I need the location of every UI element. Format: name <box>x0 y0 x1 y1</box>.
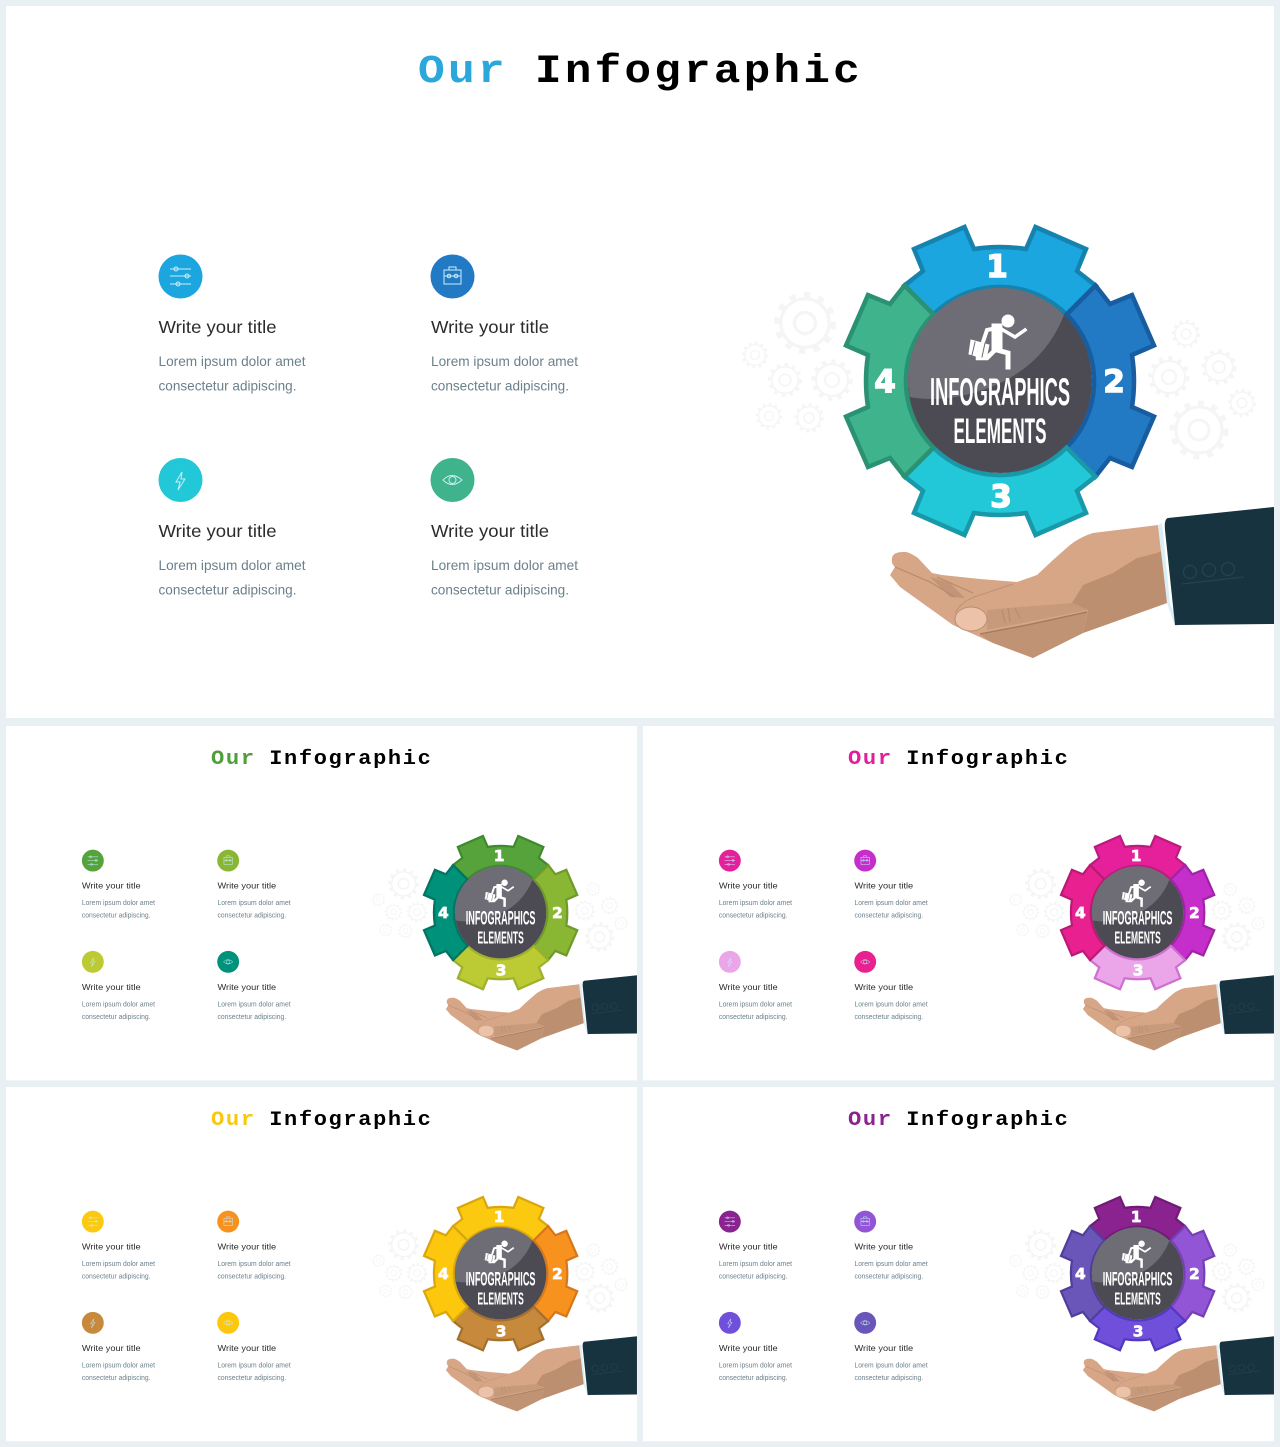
hand holding gear <box>890 507 1274 658</box>
item 3 body: consectetur adipiscing. <box>82 1375 151 1382</box>
gear diagram: INFOGRAPHICS <box>466 908 535 930</box>
item 2 body: Lorem ipsum dolor amet <box>854 1261 928 1268</box>
gear diagram: 3 <box>1133 961 1143 979</box>
gear diagram: 3 <box>496 961 506 979</box>
icon: eye <box>854 1312 876 1334</box>
gear diagram: 4 <box>1075 904 1086 922</box>
item 3 body: consectetur adipiscing. <box>719 1014 788 1021</box>
hand holding gear <box>446 1336 637 1411</box>
item 4 body: Lorem ipsum dolor amet <box>854 1002 928 1009</box>
item 2 body: Lorem ipsum dolor amet <box>217 1261 291 1268</box>
title <box>418 50 863 95</box>
title <box>848 1108 1069 1131</box>
gear diagram: ELEMENTS <box>1114 927 1161 947</box>
item 4 body <box>854 1363 928 1382</box>
icon: briefcase <box>854 850 876 872</box>
icon: briefcase <box>854 1211 876 1233</box>
icon: eye <box>217 951 239 973</box>
item 3 body: Lorem ipsum dolor amet <box>82 1002 155 1009</box>
item 3 body <box>82 1363 155 1382</box>
item 2 heading: Write your title <box>217 1242 276 1252</box>
item 1 heading: Write your title <box>82 881 141 891</box>
title: Our <box>211 747 256 770</box>
title: Our <box>848 1108 893 1131</box>
gear diagram: ELEMENTS <box>477 1288 524 1308</box>
item 3 body: consectetur adipiscing. <box>82 1014 151 1021</box>
item 2 <box>217 1211 291 1280</box>
item 1 body: Lorem ipsum dolor amet <box>719 900 792 907</box>
panel: pink slide <box>643 726 1274 1080</box>
item 3 heading: Write your title <box>82 982 141 992</box>
item 3 <box>719 951 792 1021</box>
gear diagram: 3 <box>496 1322 506 1340</box>
item 2 <box>430 254 578 394</box>
item 1 body: consectetur adipiscing. <box>719 912 788 919</box>
gear diagram: 4 <box>1075 1265 1086 1283</box>
gear diagram: 1 <box>494 1208 504 1226</box>
item 4 body: consectetur adipiscing. <box>431 582 569 598</box>
item 1 body <box>158 353 306 394</box>
item 1 body: Lorem ipsum dolor amet <box>82 1261 155 1268</box>
item 3 body <box>158 557 306 598</box>
item 4 body <box>217 1363 291 1382</box>
item 3 body <box>82 1002 155 1021</box>
icon: lightning bolt <box>719 951 741 973</box>
icon: briefcase <box>430 254 474 298</box>
item 2 body <box>854 1261 928 1280</box>
icon: lightning bolt <box>82 951 104 973</box>
icon: briefcase <box>217 1211 239 1233</box>
item 1 <box>82 1211 155 1280</box>
item 3 body: Lorem ipsum dolor amet <box>719 1363 792 1370</box>
item 1 body: consectetur adipiscing. <box>719 1273 788 1280</box>
item 2 body: consectetur adipiscing. <box>431 378 569 394</box>
icon: sliders <box>158 254 202 298</box>
gear diagram: ELEMENTS <box>477 927 524 947</box>
icon: eye <box>854 951 876 973</box>
title <box>848 747 1069 770</box>
item 3 <box>82 1312 155 1382</box>
title: Infographic <box>269 1108 432 1131</box>
item 1 body: consectetur adipiscing. <box>158 378 296 394</box>
gear diagram: ELEMENTS <box>954 412 1046 451</box>
item 1 heading: Write your title <box>158 317 276 337</box>
item 4 <box>217 1312 291 1382</box>
item 3 body: Lorem ipsum dolor amet <box>719 1002 792 1009</box>
icon: eye <box>430 458 474 502</box>
icon: sliders <box>719 1211 741 1233</box>
item 4 heading: Write your title <box>431 521 549 541</box>
item 4 body: consectetur adipiscing. <box>854 1375 923 1382</box>
item 2 body: Lorem ipsum dolor amet <box>854 900 928 907</box>
item 3 body <box>719 1363 792 1382</box>
item 1 body: Lorem ipsum dolor amet <box>82 900 155 907</box>
item 2 <box>854 850 928 919</box>
item 2 body: Lorem ipsum dolor amet <box>217 900 291 907</box>
gear diagram: 4 <box>438 1265 449 1283</box>
item 3 heading: Write your title <box>82 1343 141 1353</box>
item 4 heading: Write your title <box>854 982 913 992</box>
item 1 <box>158 254 306 394</box>
background gear icons <box>373 1231 627 1311</box>
gear diagram <box>424 1197 577 1350</box>
icon: lightning bolt <box>82 1312 104 1334</box>
item 4 heading: Write your title <box>217 1343 276 1353</box>
item 2 heading: Write your title <box>854 881 913 891</box>
item 2 <box>854 1211 928 1280</box>
item 3 body <box>719 1002 792 1021</box>
item 3 body: Lorem ipsum dolor amet <box>158 557 306 573</box>
gear diagram: 3 <box>990 479 1012 515</box>
item 4 <box>854 1312 928 1382</box>
item 2 heading: Write your title <box>854 1242 913 1252</box>
item 3 body: consectetur adipiscing. <box>158 582 296 598</box>
item 1 body <box>82 1261 155 1280</box>
title <box>211 747 432 770</box>
icon: sliders <box>719 850 741 872</box>
item 3 <box>82 951 155 1021</box>
item 2 body: consectetur adipiscing. <box>854 912 923 919</box>
gear diagram <box>846 227 1154 535</box>
item 2 body <box>431 353 578 394</box>
item 4 body <box>431 557 578 598</box>
gear diagram <box>1061 1197 1214 1350</box>
item 2 body: consectetur adipiscing. <box>217 912 286 919</box>
panel: green slide <box>6 726 637 1080</box>
item 1 <box>719 1211 792 1280</box>
item 1 body: Lorem ipsum dolor amet <box>719 1261 792 1268</box>
gear diagram: 1 <box>1131 1208 1141 1226</box>
item 2 body: consectetur adipiscing. <box>217 1273 286 1280</box>
gear diagram: INFOGRAPHICS <box>930 371 1070 414</box>
item 1 heading: Write your title <box>719 1242 778 1252</box>
gear diagram: 2 <box>552 1265 563 1283</box>
panel: yellow slide <box>6 1087 637 1441</box>
gear diagram: INFOGRAPHICS <box>1103 908 1172 930</box>
gear diagram: 2 <box>1189 904 1200 922</box>
title: Our <box>418 50 508 95</box>
item 4 heading: Write your title <box>217 982 276 992</box>
icon: eye <box>217 1312 239 1334</box>
item 4 <box>217 951 291 1021</box>
title: Infographic <box>906 1108 1069 1131</box>
item 4 body: consectetur adipiscing. <box>217 1014 286 1021</box>
item 3 <box>719 1312 792 1382</box>
icon: sliders <box>82 1211 104 1233</box>
item 4 body: consectetur adipiscing. <box>217 1375 286 1382</box>
item 4 <box>430 458 578 598</box>
item 4 body <box>217 1002 291 1021</box>
item 1 body <box>82 900 155 919</box>
item 1 <box>719 850 792 919</box>
item 3 <box>158 458 306 598</box>
item 4 body: Lorem ipsum dolor amet <box>431 557 578 573</box>
gear diagram <box>1061 836 1214 989</box>
panel: main blue slide <box>6 6 1274 718</box>
item 3 heading: Write your title <box>719 982 778 992</box>
gear diagram: 1 <box>986 249 1008 285</box>
item 2 heading: Write your title <box>431 317 549 337</box>
item 2 body <box>217 1261 291 1280</box>
item 1 body <box>719 1261 792 1280</box>
gear diagram: 4 <box>874 364 896 400</box>
title: Infographic <box>906 747 1069 770</box>
gear diagram: 2 <box>1189 1265 1200 1283</box>
gear diagram: 3 <box>1133 1322 1143 1340</box>
gear diagram: 1 <box>1131 847 1141 865</box>
icon: lightning bolt <box>719 1312 741 1334</box>
background gear icons <box>743 295 1255 457</box>
item 4 body <box>854 1002 928 1021</box>
item 4 heading: Write your title <box>854 1343 913 1353</box>
item 1 body: consectetur adipiscing. <box>82 912 151 919</box>
gear diagram: 2 <box>1103 364 1125 400</box>
item 4 body: consectetur adipiscing. <box>854 1014 923 1021</box>
icon: lightning bolt <box>158 458 202 502</box>
gear diagram: ELEMENTS <box>1114 1288 1161 1308</box>
item 1 <box>82 850 155 919</box>
item 4 body: Lorem ipsum dolor amet <box>217 1363 291 1370</box>
panel: purple slide <box>643 1087 1274 1441</box>
item 1 body <box>719 900 792 919</box>
title <box>211 1108 432 1131</box>
title: Our <box>848 747 893 770</box>
item 1 body: Lorem ipsum dolor amet <box>158 353 306 369</box>
background gear icons <box>373 870 627 950</box>
icon: briefcase <box>217 850 239 872</box>
hand holding gear <box>1083 1336 1274 1411</box>
gear diagram: INFOGRAPHICS <box>466 1269 535 1291</box>
item 2 <box>217 850 291 919</box>
background gear icons <box>1010 1231 1264 1311</box>
hand holding gear <box>446 975 637 1050</box>
title: Our <box>211 1108 256 1131</box>
title: Infographic <box>269 747 432 770</box>
item 2 body <box>854 900 928 919</box>
item 4 body: Lorem ipsum dolor amet <box>217 1002 291 1009</box>
hand holding gear <box>1083 975 1274 1050</box>
gear diagram <box>424 836 577 989</box>
item 2 heading: Write your title <box>217 881 276 891</box>
item 1 heading: Write your title <box>719 881 778 891</box>
item 3 heading: Write your title <box>158 521 276 541</box>
gear diagram: 4 <box>438 904 449 922</box>
item 4 body: Lorem ipsum dolor amet <box>854 1363 928 1370</box>
item 2 body: Lorem ipsum dolor amet <box>431 353 578 369</box>
gear diagram: 1 <box>494 847 504 865</box>
item 2 body: consectetur adipiscing. <box>854 1273 923 1280</box>
background gear icons <box>1010 870 1264 950</box>
gear diagram: 2 <box>552 904 563 922</box>
item 1 body: consectetur adipiscing. <box>82 1273 151 1280</box>
gear diagram: INFOGRAPHICS <box>1103 1269 1172 1291</box>
item 3 body: Lorem ipsum dolor amet <box>82 1363 155 1370</box>
item 2 body <box>217 900 291 919</box>
item 4 <box>854 951 928 1021</box>
item 3 body: consectetur adipiscing. <box>719 1375 788 1382</box>
item 1 heading: Write your title <box>82 1242 141 1252</box>
item 3 heading: Write your title <box>719 1343 778 1353</box>
title: Infographic <box>535 50 863 95</box>
icon: sliders <box>82 850 104 872</box>
